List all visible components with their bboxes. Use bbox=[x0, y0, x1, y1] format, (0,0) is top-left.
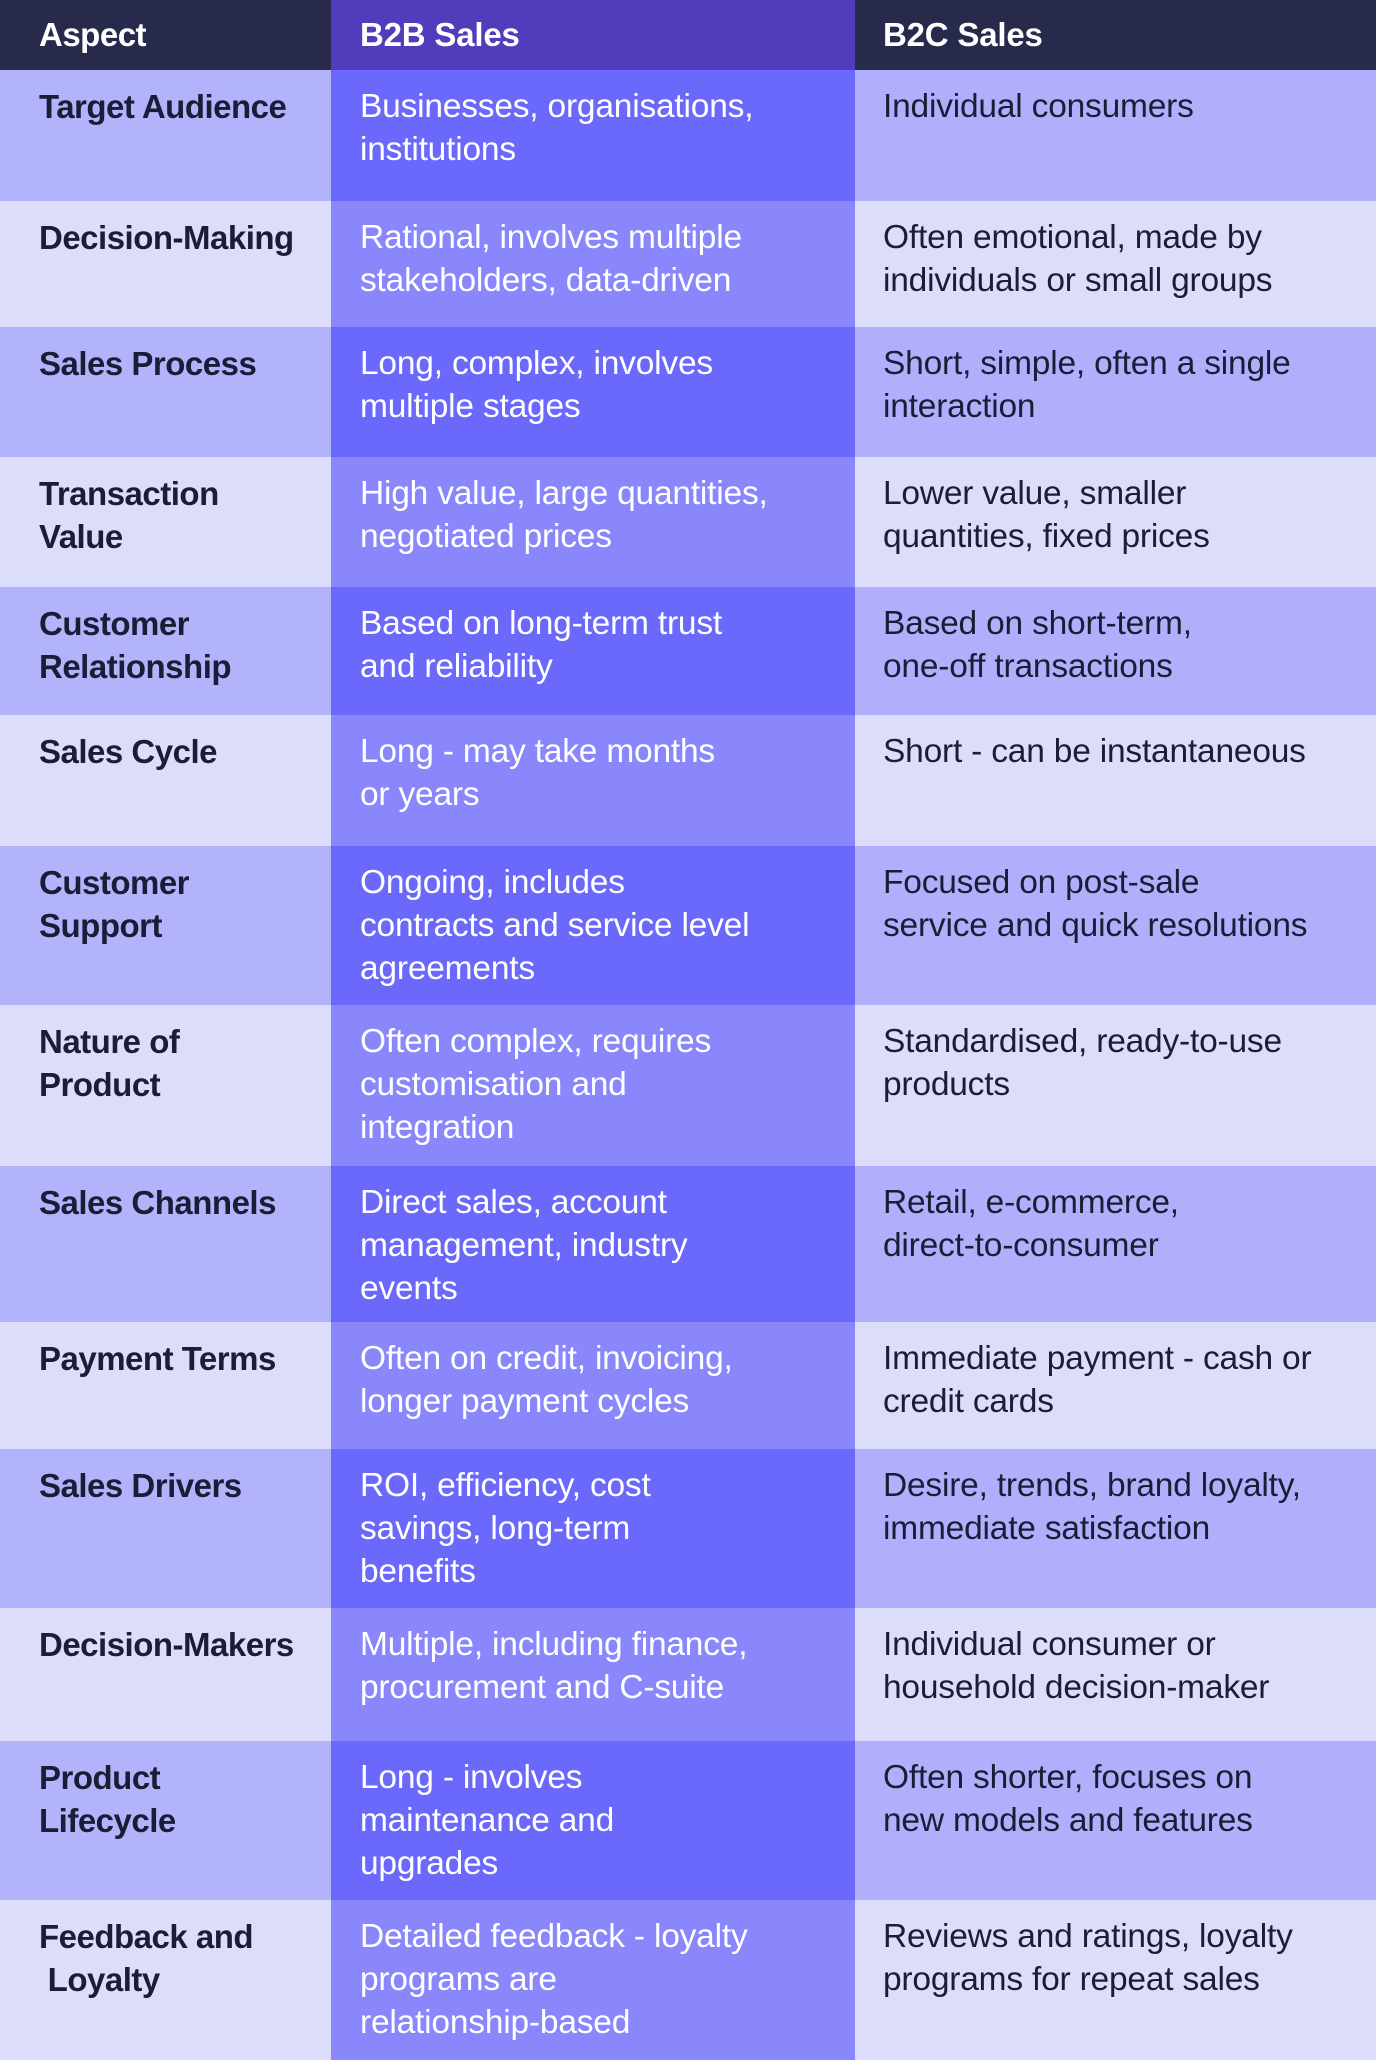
row: product lifecycle bbox=[0, 1741, 1376, 1900]
row: sales channels: direct-to-consumer bbox=[883, 1227, 1159, 1264]
row: target audience: institutions bbox=[360, 131, 516, 168]
row: feedback and loyalty: Reviews and ratings, loyalty bbox=[883, 1918, 1293, 1955]
row: nature of product: integration bbox=[360, 1109, 514, 1146]
row: target audience bbox=[0, 70, 1376, 201]
row: customer support: contracts and service level bbox=[360, 907, 749, 944]
row: feedback and loyalty: Detailed feedback - loyalty bbox=[360, 1918, 748, 1955]
row: sales channels: events bbox=[360, 1270, 458, 1307]
row: sales process: Short, simple, often a single bbox=[883, 345, 1291, 382]
row: customer relationship: one-off transactions bbox=[883, 648, 1173, 685]
row: payment terms: Immediate payment - cash or bbox=[883, 1340, 1311, 1377]
row: payment terms: Payment Terms bbox=[39, 1340, 276, 1377]
row: payment terms bbox=[39, 1322, 1312, 1449]
row: target audience: Businesses, organisations, bbox=[360, 88, 753, 125]
row: sales drivers: immediate satisfaction bbox=[883, 1510, 1210, 1547]
row: sales process: Sales Process bbox=[39, 345, 256, 382]
row: sales process bbox=[0, 327, 1376, 457]
header row bbox=[0, 0, 1376, 70]
row: customer support: Customer bbox=[39, 864, 189, 901]
row: sales cycle: Sales Cycle bbox=[39, 733, 217, 770]
row: target audience: Target Audience bbox=[39, 88, 286, 125]
row: sales channels bbox=[0, 1166, 1376, 1322]
row: decision-making: Decision-Making bbox=[39, 219, 294, 256]
row: sales channels: Direct sales, account bbox=[360, 1184, 667, 1221]
row: transaction value: negotiated prices bbox=[360, 518, 612, 555]
row: nature of product: Nature of bbox=[39, 1023, 179, 1060]
row: sales channels: management, industry bbox=[360, 1227, 687, 1264]
row: sales cycle bbox=[39, 715, 1306, 846]
row: sales process: multiple stages bbox=[360, 388, 580, 425]
row: nature of product: Often complex, requires bbox=[360, 1023, 711, 1060]
row: sales channels: Sales Channels bbox=[39, 1184, 276, 1221]
row: sales process: interaction bbox=[883, 388, 1035, 425]
row: payment terms: longer payment cycles bbox=[360, 1383, 689, 1420]
row: transaction value: quantities, fixed prices bbox=[883, 518, 1210, 555]
row: transaction value bbox=[39, 457, 1210, 587]
row: sales drivers: ROI, efficiency, cost bbox=[360, 1467, 651, 1504]
row: decision-makers: Multiple, including finance, bbox=[360, 1626, 747, 1663]
row: decision-making bbox=[39, 201, 1272, 327]
row: sales cycle: or years bbox=[360, 776, 479, 813]
row: product lifecycle: Long - involves bbox=[360, 1759, 582, 1796]
row: feedback and loyalty: programs are bbox=[360, 1961, 557, 1998]
row: sales drivers bbox=[0, 1449, 1376, 1608]
row: decision-making: Rational, involves multiple bbox=[360, 219, 742, 256]
row: nature of product: Product bbox=[39, 1066, 160, 1103]
row: customer relationship: and reliability bbox=[360, 648, 553, 685]
row: decision-makers: Decision-Makers bbox=[39, 1626, 294, 1663]
row: transaction value: Lower value, smaller bbox=[883, 475, 1186, 512]
row: customer relationship: Based on short-term, bbox=[883, 605, 1192, 642]
row: feedback and loyalty: Loyalty bbox=[48, 1961, 160, 1998]
row: decision-makers: procurement and C-suite bbox=[360, 1669, 724, 1706]
row: payment terms: Often on credit, invoicing, bbox=[360, 1340, 733, 1377]
row: product lifecycle: Lifecycle bbox=[39, 1802, 176, 1839]
header row: B2B Sales bbox=[360, 16, 520, 53]
row: customer relationship: Customer bbox=[39, 605, 189, 642]
row: decision-making: individuals or small groups bbox=[883, 262, 1272, 299]
row: sales process: Long, complex, involves bbox=[360, 345, 713, 382]
row: transaction value: Transaction bbox=[39, 475, 219, 512]
row: nature of product: customisation and bbox=[360, 1066, 627, 1103]
row: transaction value: High value, large quantities, bbox=[360, 475, 768, 512]
row: sales cycle: Short - can be instantaneous bbox=[883, 733, 1306, 770]
row: target audience: Individual consumers bbox=[883, 88, 1194, 125]
header row: B2C Sales bbox=[883, 16, 1043, 53]
row: product lifecycle: maintenance and bbox=[360, 1802, 614, 1839]
row: decision-makers bbox=[39, 1608, 1269, 1741]
row: customer support: Focused on post-sale bbox=[883, 864, 1199, 901]
row: sales channels: Retail, e-commerce, bbox=[883, 1184, 1179, 1221]
row: nature of product: products bbox=[883, 1066, 1010, 1103]
row: decision-making: stakeholders, data-driven bbox=[360, 262, 731, 299]
row: sales drivers: benefits bbox=[360, 1553, 476, 1590]
row: product lifecycle: new models and features bbox=[883, 1802, 1253, 1839]
row: payment terms: credit cards bbox=[883, 1383, 1054, 1420]
row: customer support bbox=[0, 846, 1376, 1005]
row: product lifecycle: Often shorter, focuses on bbox=[883, 1759, 1252, 1796]
row: customer relationship bbox=[0, 587, 1376, 715]
row: decision-makers: household decision-maker bbox=[883, 1669, 1269, 1706]
row: nature of product bbox=[39, 1005, 1282, 1166]
row: customer relationship: Relationship bbox=[39, 648, 231, 685]
row: product lifecycle: upgrades bbox=[360, 1845, 498, 1882]
row: decision-making: Often emotional, made by bbox=[883, 219, 1262, 256]
row: customer support: Ongoing, includes bbox=[360, 864, 625, 901]
row: customer relationship: Based on long-term trust bbox=[360, 605, 722, 642]
row: sales drivers: savings, long-term bbox=[360, 1510, 630, 1547]
row: decision-makers: Individual consumer or bbox=[883, 1626, 1216, 1663]
row: customer support: Support bbox=[39, 907, 162, 944]
row: sales drivers: Desire, trends, brand loyalty, bbox=[883, 1467, 1301, 1504]
row: transaction value: Value bbox=[39, 518, 123, 555]
header row: Aspect bbox=[39, 16, 146, 53]
row: sales cycle: Long - may take months bbox=[360, 733, 715, 770]
row: nature of product: Standardised, ready-to-use bbox=[883, 1023, 1282, 1060]
row: customer support: agreements bbox=[360, 950, 535, 987]
row: product lifecycle: Product bbox=[39, 1759, 160, 1796]
row: feedback and loyalty bbox=[39, 1900, 1293, 2060]
row: feedback and loyalty: programs for repeat sales bbox=[883, 1961, 1260, 1998]
row: sales drivers: Sales Drivers bbox=[39, 1467, 242, 1504]
row: feedback and loyalty: Feedback and bbox=[39, 1918, 253, 1955]
row: customer support: service and quick resolutions bbox=[883, 907, 1307, 944]
row: feedback and loyalty: relationship-based bbox=[360, 2004, 630, 2041]
